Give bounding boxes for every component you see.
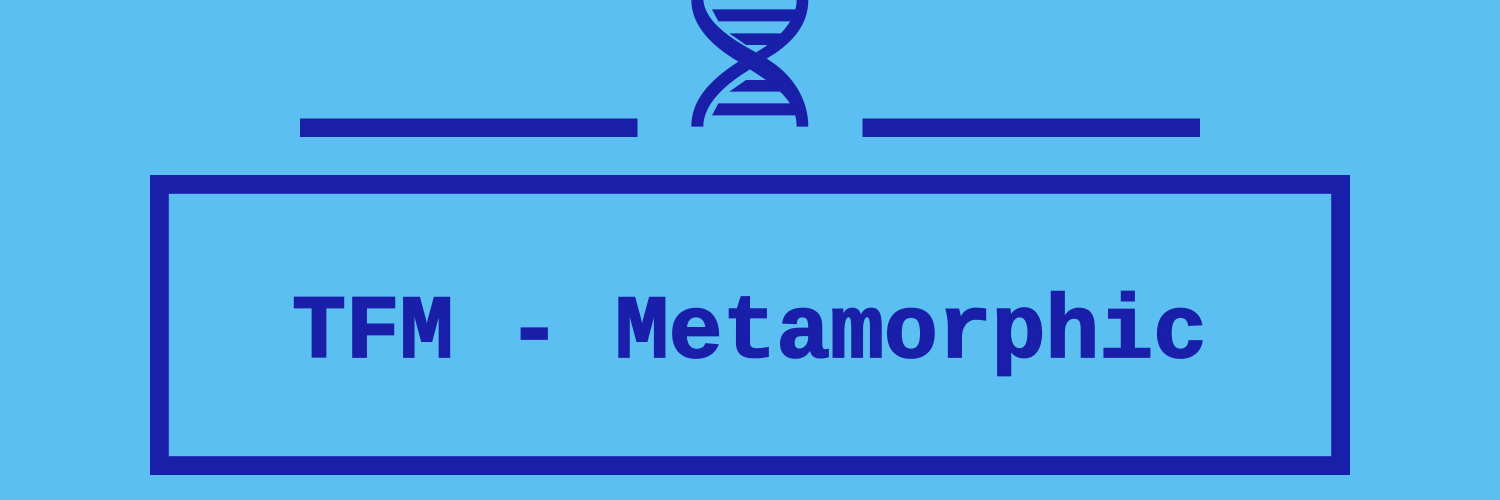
icon: dna helix xyxy=(691,0,808,127)
title: TFM - Metamorphic xyxy=(292,283,1207,385)
right divider line xyxy=(862,118,1200,137)
left divider line xyxy=(300,118,638,137)
title frame xyxy=(159,184,1341,466)
